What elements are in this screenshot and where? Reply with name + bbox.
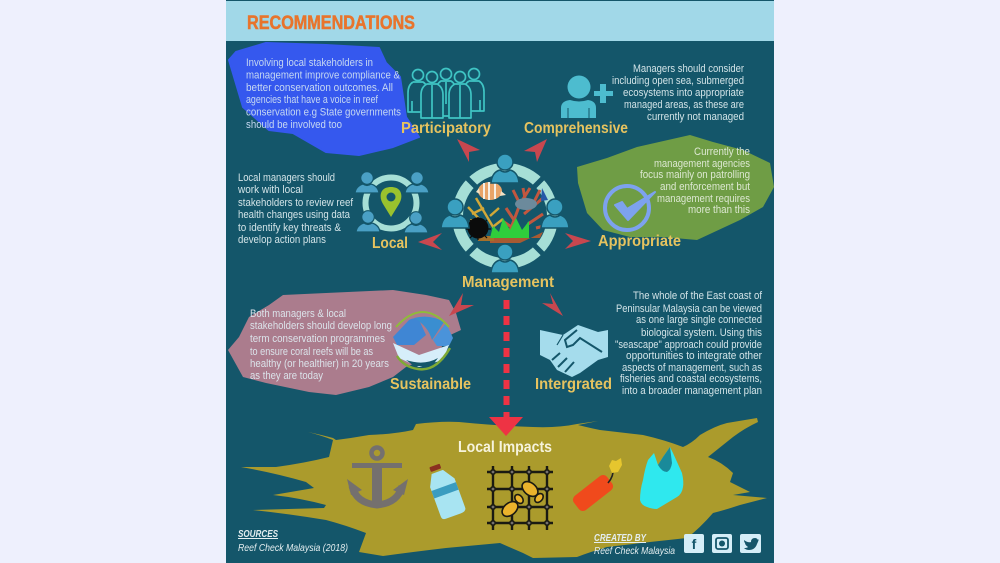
text: local: work with local	[237, 184, 303, 196]
text: local: Local managers should	[238, 172, 335, 184]
text: comprehensive: including open sea, submerged	[612, 75, 744, 87]
arrow: to appropriate	[565, 233, 591, 249]
text: created by: Reef Check Malaysia	[594, 546, 675, 557]
panel: sustainable brush and text	[228, 290, 461, 395]
text: sources	[238, 529, 348, 554]
heading: appropriate: Appropriate	[598, 233, 681, 250]
heading: comprehensive: Comprehensive	[524, 120, 628, 137]
heading: local impacts: Local Impacts	[458, 439, 552, 456]
text: integrated: aspects of management, such as	[622, 362, 762, 374]
icon: dynamite	[571, 458, 622, 513]
icon: facebook	[684, 534, 704, 553]
icon: instagram	[712, 534, 732, 553]
heading: participatory: Participatory	[401, 120, 491, 137]
text: local: to identify key threats &	[238, 222, 342, 234]
heading: sustainable: Sustainable	[390, 376, 471, 393]
icon: local pin and people	[355, 172, 429, 233]
text: participatory: conservation e.g State governments	[246, 106, 401, 118]
arrow: to local	[418, 233, 442, 250]
icon: check circle	[605, 186, 655, 230]
arrow: to participatory	[457, 139, 480, 162]
heading: integrated: Intergrated	[535, 376, 612, 393]
icon: anchor	[347, 448, 408, 507]
text: participatory: better conservation outcomes. All	[246, 82, 393, 94]
text: sustainable: Both managers & local	[250, 308, 346, 320]
text: sources: Reef Check Malaysia (2018)	[238, 543, 348, 554]
text: local: health changes using data	[238, 209, 351, 221]
text: sustainable	[250, 308, 392, 382]
icon: twitter	[740, 534, 761, 553]
panel: local impacts olive shape	[241, 418, 767, 558]
panel: infographic background	[226, 0, 774, 563]
text: created by	[594, 533, 675, 557]
text: participatory	[246, 57, 401, 131]
icon: fishing net with fish	[487, 466, 553, 530]
header band	[226, 1, 774, 41]
text: appropriate: and enforcement but	[660, 181, 750, 193]
text: sustainable: to ensure coral reefs will be as	[250, 346, 373, 358]
text: appropriate: focus mainly on patrolling	[640, 169, 750, 181]
text: sustainable: as they are today	[250, 370, 323, 382]
text: sources: SOURCES	[238, 529, 278, 540]
text: integrated	[615, 290, 763, 397]
arrow: to sustainable	[449, 293, 474, 316]
text: participatory: management improve compliance &	[246, 70, 401, 82]
panel: appropriate brush and text	[577, 135, 774, 240]
text: integrated: as one large single connected	[636, 314, 762, 326]
text: comprehensive: managed areas, as these are	[624, 99, 744, 111]
text: local	[237, 172, 354, 246]
text: local: stakeholders to review reef	[238, 197, 354, 209]
arrow: to comprehensive	[524, 139, 547, 162]
text: appropriate: more than this	[688, 204, 750, 216]
icon: facebook: f	[692, 536, 697, 552]
icon: handshake	[540, 325, 608, 377]
text: comprehensive: currently not managed	[647, 111, 744, 123]
text: comprehensive: ecosystems into appropriate	[623, 87, 744, 99]
heading: local: Local	[372, 235, 408, 252]
icon: plastic bag	[640, 447, 683, 509]
people around ring	[441, 154, 569, 273]
text: appropriate: management requires	[657, 193, 750, 205]
icon: sustainable globe	[393, 312, 453, 369]
text: appropriate	[640, 146, 750, 216]
text: comprehensive: Managers should consider	[633, 63, 744, 75]
panel: participatory brush and text	[229, 43, 419, 155]
icon: group of people outline	[408, 68, 484, 118]
text: integrated: into a broader management plan	[622, 385, 762, 397]
coral scene	[466, 182, 548, 243]
text: integrated: opportunities to integrate other	[626, 350, 762, 362]
text: appropriate: management agencies	[654, 158, 750, 170]
text: integrated: fisheries and coastal ecosystems,	[620, 373, 762, 385]
heading: management: Management	[462, 274, 554, 291]
arrow: management to local impacts	[489, 300, 523, 436]
text: sustainable: stakeholders should develop long	[250, 320, 392, 332]
icon: plastic bottle	[424, 461, 467, 520]
icon: person plus	[561, 76, 613, 118]
text: sustainable: healthy (or healthier) in 20 years	[250, 358, 389, 370]
text: created by: CREATED BY	[594, 533, 647, 544]
icon: management ring with coral scene	[441, 154, 569, 273]
text: sustainable: term conservation programmes	[250, 333, 385, 345]
title: RECOMMENDATIONS	[247, 13, 415, 34]
text: integrated: The whole of the East coast of	[633, 290, 763, 302]
text: appropriate: Currently the	[694, 146, 750, 158]
text: comprehensive	[612, 63, 744, 123]
text: integrated: Peninsular Malaysia can be viewed	[616, 303, 762, 315]
text: participatory: agencies that have a voice in reef	[246, 94, 379, 106]
text: participatory: should be involved too	[246, 119, 342, 131]
text: local: develop action plans	[238, 234, 326, 246]
text: integrated: "seascape" approach could provide	[615, 339, 762, 351]
arrow: to integrated	[542, 293, 563, 316]
text: participatory: Involving local stakeholders in	[246, 57, 373, 69]
text: integrated: biological system. Using this	[641, 327, 762, 339]
